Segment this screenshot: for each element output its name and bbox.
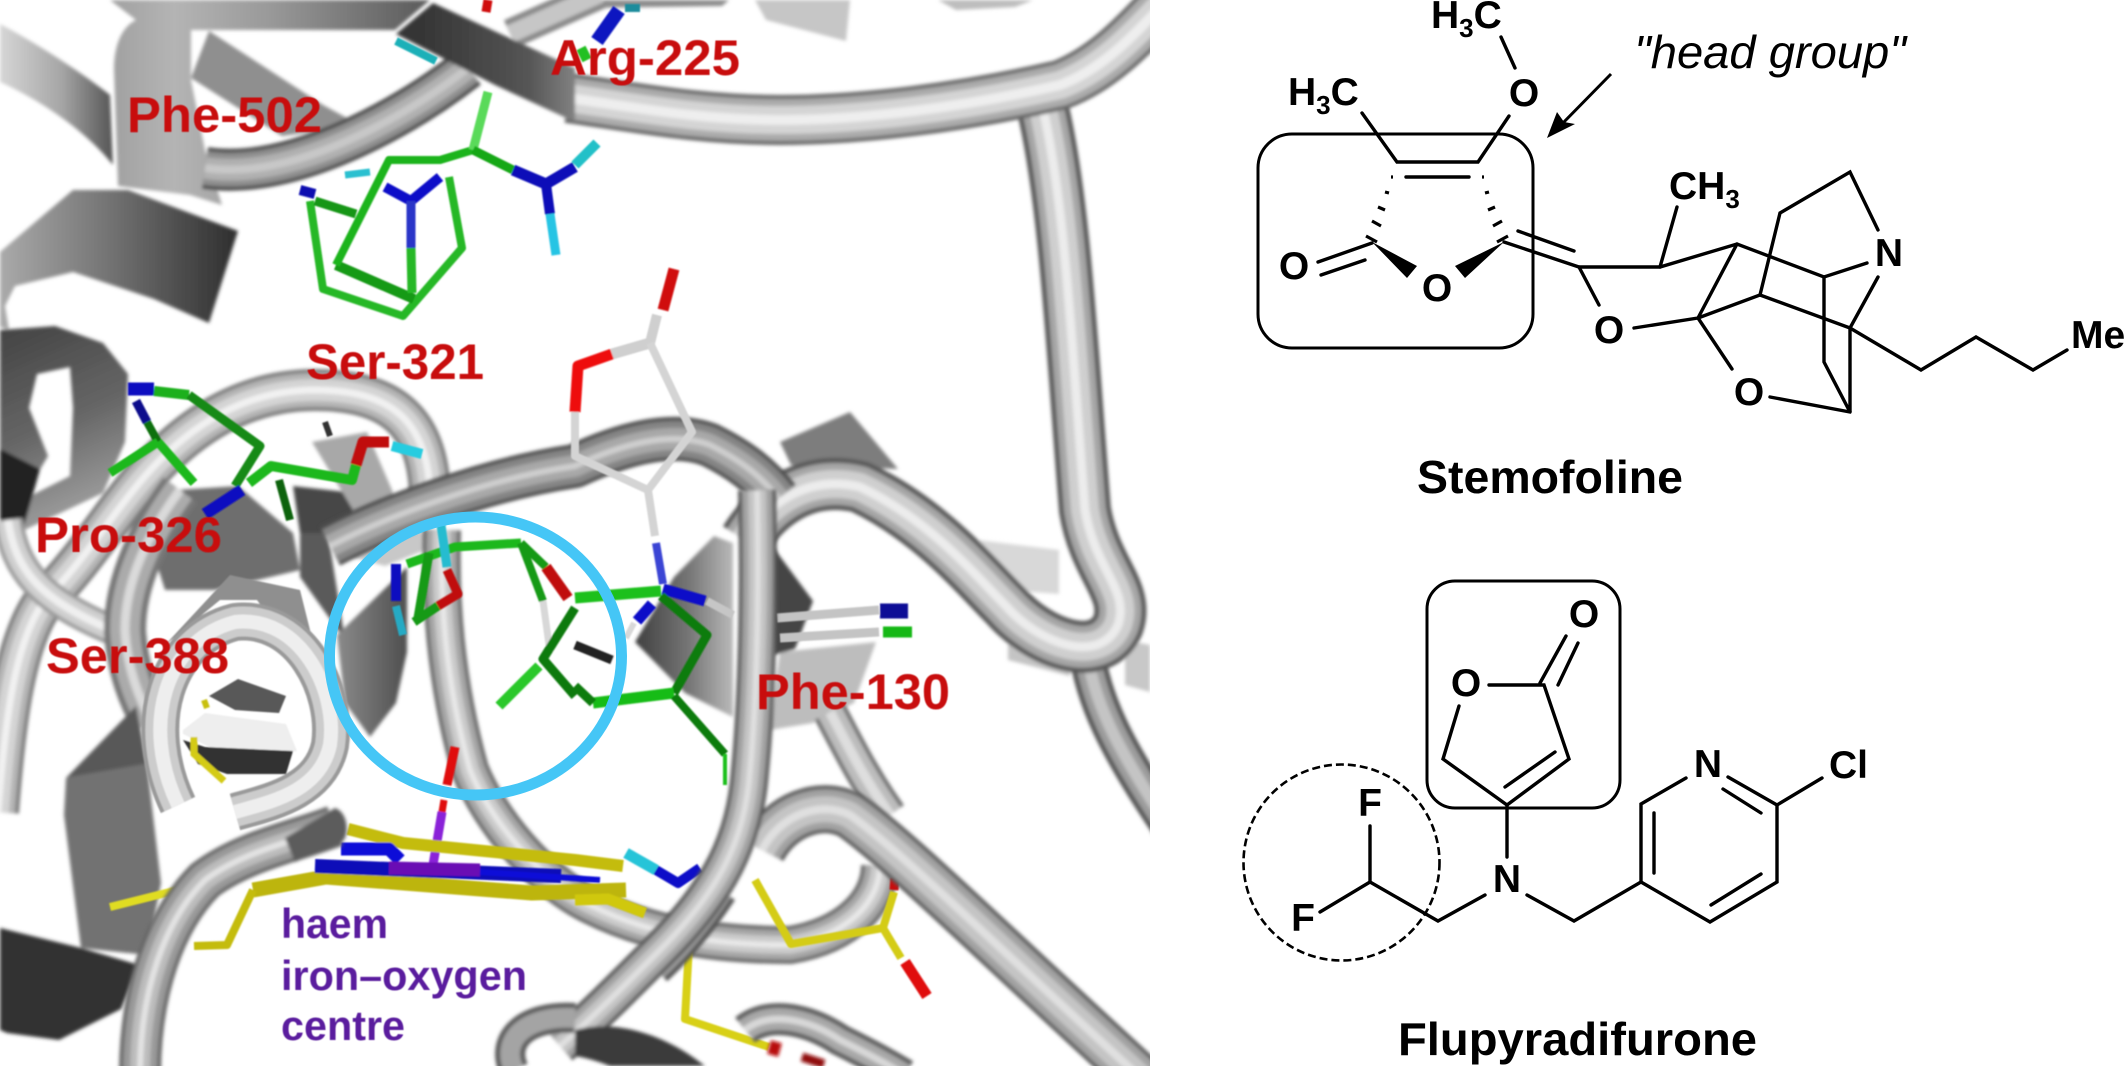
label: CH3: CH: [1669, 165, 1725, 208]
structure: Flupyradifurone: [1244, 581, 1868, 1065]
label: haem iron-oxygen centre: [281, 900, 527, 1049]
label: haem iron-oxygen centre: iron–oxygen: [281, 952, 527, 999]
atom labels: O: [1509, 72, 1539, 115]
label: head group: "head group": [1634, 26, 1909, 78]
label: Cl: Cl: [1829, 744, 1868, 787]
label: Me: Me: [2071, 314, 2125, 357]
butenolide box: [1427, 581, 1620, 808]
ribbon central tubes: [330, 439, 890, 945]
structure: Stemofoline: O: [1422, 267, 1452, 310]
label: haem iron-oxygen centre: centre: [281, 1002, 405, 1049]
sticks: active ligand in highlighted site: [396, 525, 912, 785]
label: Ser-388: Ser-388: [46, 628, 229, 684]
structure: Stemofoline: O: [1734, 371, 1764, 414]
structure: Flupyradifurone: F: [1358, 782, 1382, 825]
label: Phe-130: Phe-130: [756, 664, 950, 720]
sticks: Pro-326 and Ser-321 residues: [110, 389, 422, 520]
label: Arg-225: Arg-225: [550, 30, 740, 86]
highlight circle: [330, 517, 622, 795]
ribbon backbone rear: [0, 0, 1175, 1040]
label: Phe-502: Phe-502: [127, 87, 322, 143]
sticks: head-group ligand: [575, 269, 692, 536]
structure: Flupyradifurone: N: [1694, 743, 1722, 786]
label: H3C methyl: 3: [1316, 90, 1331, 120]
label: haem iron-oxygen centre: haem: [281, 900, 388, 947]
label: H3C methoxy: 3: [1459, 13, 1474, 43]
head group box: [1258, 134, 1533, 348]
hashed bonds: [1366, 177, 1508, 242]
sticks: Arg-225 and Phe-502 residues: [300, 0, 640, 316]
wedge bonds: [1372, 242, 1504, 278]
label: Pro-326: Pro-326: [35, 507, 222, 563]
structure: Stemofoline: [1258, 0, 2125, 503]
compound name: Stemofoline: Stemofoline: [1417, 451, 1683, 503]
label: CH3: 3: [1725, 184, 1740, 214]
structure: Flupyradifurone: F: [1291, 897, 1315, 940]
arrow to head group: [1547, 74, 1611, 138]
label: H3C methyl: H: [1288, 71, 1316, 114]
helix curl at Ser-388: [160, 575, 331, 812]
atom labels: O: [1451, 662, 1481, 705]
panel: protein binding-site model: [0, 0, 1175, 1066]
difluoroethyl dashed circle: [1244, 764, 1440, 960]
bonds: [1318, 37, 2067, 412]
structure: Stemofoline: O: [1279, 245, 1309, 288]
structure: Flupyradifurone: O: [1569, 593, 1599, 636]
label: Ser-321: Ser-321: [306, 334, 484, 390]
ribbon front tubes: [140, 490, 1165, 1066]
residue labels: [35, 30, 950, 720]
structure: Flupyradifurone: N: [1493, 858, 1521, 901]
label: H3C methyl: C: [1331, 71, 1359, 114]
structure: Stemofoline: N: [1875, 232, 1903, 275]
bonds: [1320, 636, 1822, 922]
structure: Stemofoline: O: [1594, 309, 1624, 352]
compound name: Flupyradifurone: Flupyradifurone: [1398, 1013, 1757, 1065]
haem group sticks: [110, 747, 927, 1047]
